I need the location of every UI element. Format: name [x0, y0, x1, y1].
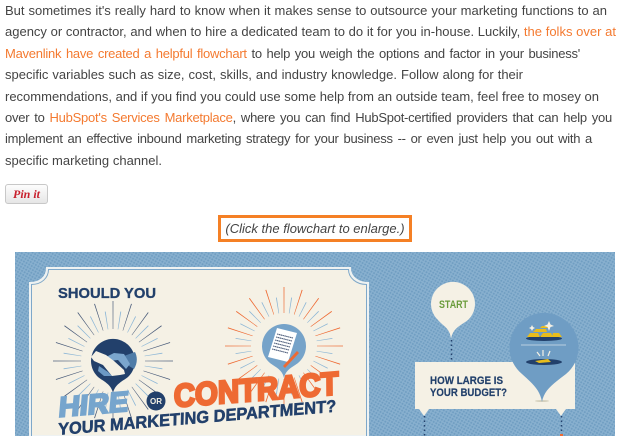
budget question box — [415, 362, 575, 416]
halftone blue background — [15, 252, 615, 436]
article text block: But sometimes it's really hard to know when it makes sense to outsource your marketing functions to an — [5, 3, 607, 18]
click to enlarge caption — [218, 215, 412, 242]
article text block: implement an effective inbound marketing strategy for your business -- or even just help you out with a — [5, 131, 592, 146]
orange connector marker — [560, 434, 563, 436]
icon: contract bubble — [262, 324, 306, 378]
click to enlarge caption: (Click the flowchart to enlarge.) — [225, 221, 405, 236]
cream title panel — [30, 268, 368, 436]
dotted connectors below box — [424, 416, 562, 436]
start bubble — [431, 282, 475, 339]
or badge: OR — [150, 397, 162, 406]
article text block: specific marketing channel. — [5, 153, 162, 168]
start bubble: START — [439, 299, 468, 311]
pin it button: Pin it — [13, 187, 40, 201]
article text block: Mavenlink have created a helpful flowchart to help you weigh the options and factor in your business' — [5, 46, 580, 61]
budget question box: HOW LARGE IS — [430, 375, 503, 387]
budget icon bubble — [510, 313, 578, 402]
article text block: over to HubSpot's Services Marketplace, where you can find HubSpot-certified providers that can help you — [5, 110, 612, 125]
article text block: recommendations, and if you find you could use some help from an outside team, feel free to mosey on — [5, 89, 599, 104]
icon: handshake bubble — [91, 339, 137, 393]
or badge — [146, 392, 166, 410]
article text block — [5, 3, 616, 168]
pin it button — [5, 184, 48, 204]
budget question box: YOUR BUDGET? — [430, 387, 507, 399]
dotted connector from start — [450, 340, 452, 362]
article text block: agency or contractor, and when to hire a dedicated team to do it for you in-house. Luckily, the folks over at — [5, 24, 616, 39]
article text block: specific variables such as size, cost, skills, and industry knowledge. Follow along for their — [5, 67, 523, 82]
hire sunburst rays — [67, 315, 159, 407]
heading: should you: SHOULD YOU — [58, 285, 156, 302]
title word: contract: CONTRACT — [174, 365, 339, 414]
title word: hire: HIRE — [57, 385, 130, 423]
contract sunburst rays — [238, 300, 330, 392]
